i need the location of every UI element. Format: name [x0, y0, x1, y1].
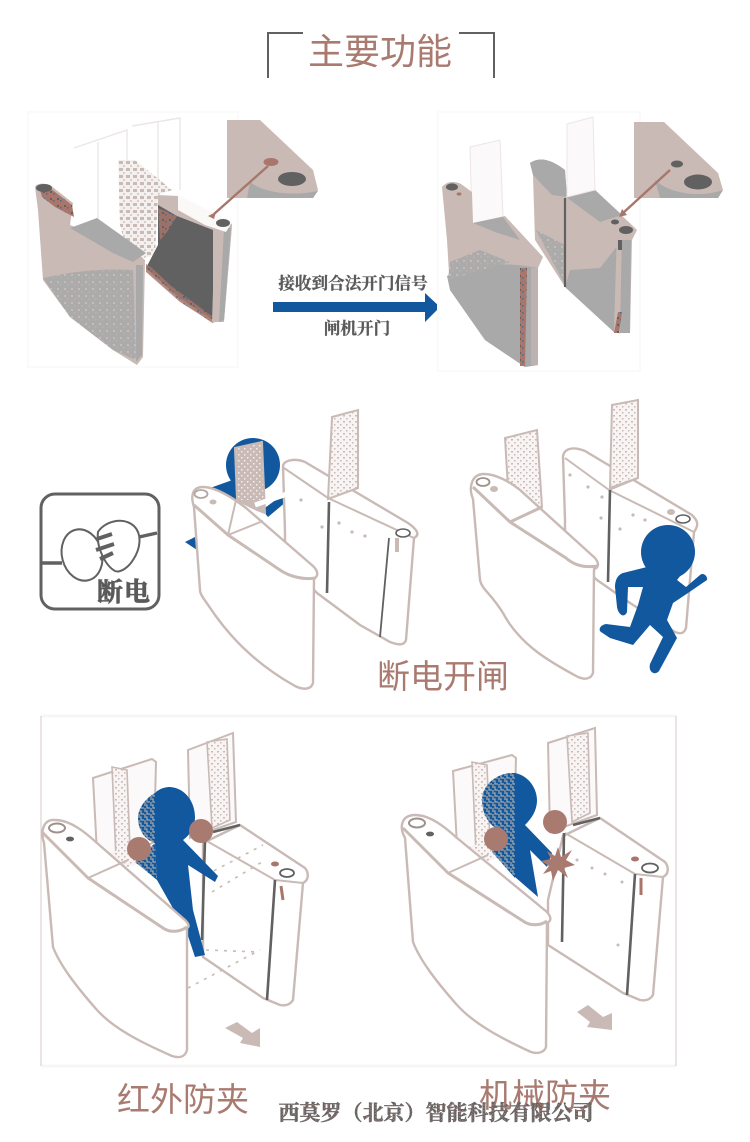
sensor markers [127, 819, 213, 861]
arrow: signal received, gate opens [273, 273, 440, 338]
panel: gate open, sensor detail [438, 112, 723, 371]
front gate outline [471, 430, 598, 679]
rear gate outline [563, 400, 697, 633]
frame around anti-pinch panels [41, 716, 676, 1066]
front gate body [35, 184, 146, 365]
title with corner brackets [268, 31, 494, 78]
panel: gate closed, sensor detail [28, 112, 318, 367]
rear gate [548, 818, 668, 1000]
front gate outline [192, 487, 317, 689]
rear gate [530, 117, 637, 334]
retracted blades [453, 728, 597, 869]
heading: infrared anti-pinch: 红外防夹 [117, 1081, 249, 1118]
rear gate outline [283, 410, 417, 644]
front blade [235, 442, 287, 513]
title with corner brackets: 主要功能 [308, 31, 452, 72]
arrow: signal received, gate opens: 接收到合法开门信号 [278, 273, 428, 293]
person behind blade [185, 438, 293, 550]
person pinched by blade [482, 773, 552, 897]
person squeezed in gate [135, 787, 218, 957]
front gate [42, 820, 189, 1057]
rear glass blades [74, 118, 180, 262]
front gate [402, 815, 550, 1053]
arrow: signal received, gate opens: 闸机开门 [324, 319, 390, 338]
panel: power off, person running through [471, 400, 707, 679]
heading: mechanical anti-pinch: 机械防夹 [479, 1077, 611, 1114]
sensor inset [208, 120, 318, 219]
sensor inset [619, 122, 723, 217]
footer company name: 西莫罗（北京）智能科技有限公司 [278, 1101, 594, 1125]
panel: power off, person behind the blade [185, 410, 417, 689]
rear gate dark inner face [146, 195, 232, 323]
rear gate [188, 825, 308, 1005]
front gate [442, 140, 543, 367]
sensor markers [484, 810, 567, 851]
icon: unplugged power: 断电 [97, 578, 151, 607]
running person [600, 525, 707, 673]
impact burst [541, 847, 575, 881]
panel: infrared anti-pinch [42, 733, 308, 1057]
heading: power-off opening: 断电开闸 [377, 658, 509, 695]
direction arrow [225, 1022, 260, 1047]
panel: mechanical anti-pinch [402, 728, 668, 1053]
retracted blades [93, 733, 236, 875]
direction arrow [577, 1005, 612, 1030]
icon: unplugged power [41, 494, 159, 609]
